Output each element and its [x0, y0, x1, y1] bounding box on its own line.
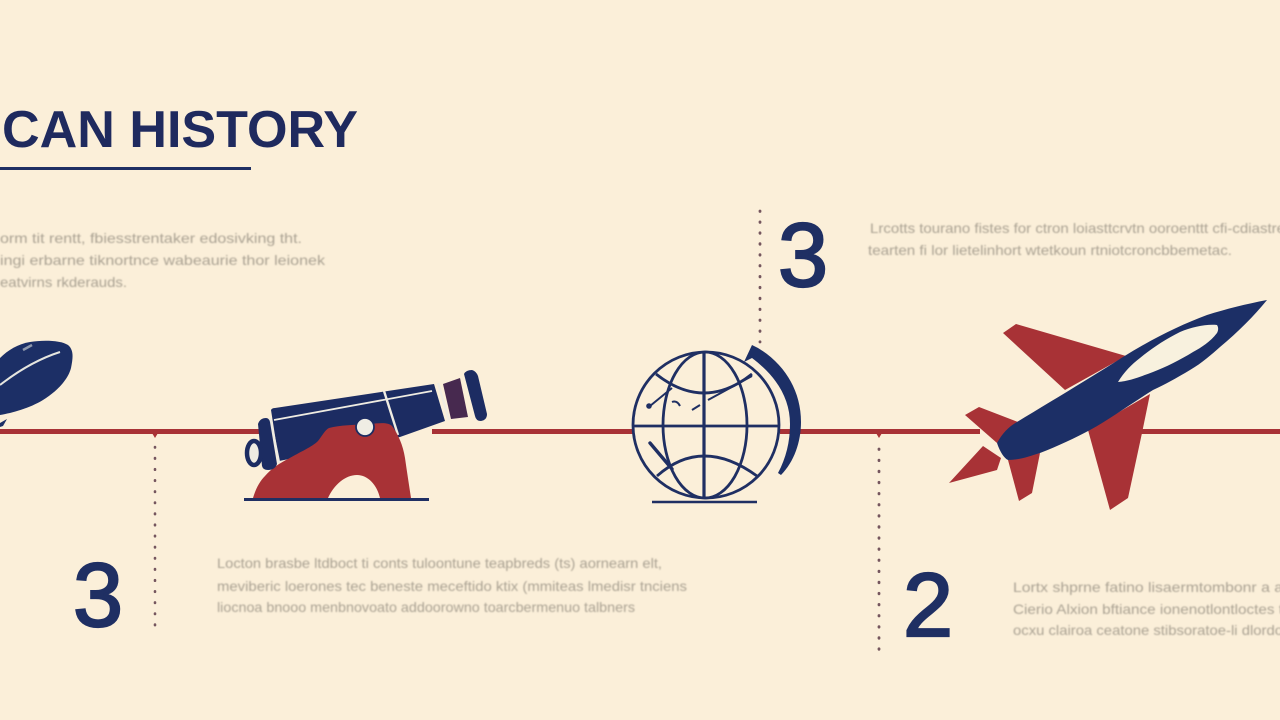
text block: upper left: orm tit rentt, fbiesstrentaker edosivking tht. — [0, 230, 302, 246]
text block: upper right: tearten fi lor lietelinhort wtetkoun rtniotcroncbbemetac. — [868, 242, 1232, 258]
text block: lower middle — [217, 555, 687, 615]
icon: airplane — [949, 300, 1267, 510]
cannon muzzle end — [464, 370, 487, 421]
timeline — [0, 429, 1280, 438]
cannon axle — [356, 418, 374, 436]
cannon base — [244, 498, 429, 501]
dotted connector: lower right — [878, 449, 880, 650]
text block: upper right — [868, 220, 1280, 258]
upper wing — [1003, 324, 1126, 390]
lower tail fin — [1008, 453, 1040, 501]
fuselage window — [1118, 325, 1218, 382]
exhaust flame — [949, 446, 1001, 483]
icon: missile nose — [0, 341, 73, 427]
cannon breech — [258, 418, 277, 470]
cannon muzzle ring — [443, 378, 468, 419]
number 3: lower left: 3 — [73, 546, 123, 646]
cannon stripes — [270, 383, 449, 463]
dotted connector: upper middle — [759, 211, 761, 342]
globe base — [652, 501, 757, 503]
cannon barrel — [271, 384, 445, 461]
title underline — [0, 167, 251, 170]
upper tail fin — [965, 407, 1018, 443]
text block: lower middle: meviberic loerones tec beneste meceftido ktix (mmiteas lmedisr tnciens — [217, 578, 687, 594]
text block: upper left: ingi erbarne tiknortnce wabeaurie thor leionek — [0, 252, 326, 268]
text block: upper left — [0, 230, 326, 290]
icon: globe — [633, 345, 801, 502]
cannon carriage — [253, 423, 411, 498]
number 3: upper middle: 3 — [778, 206, 828, 306]
title: CAN HISTORY — [2, 101, 358, 159]
cannon cascabel — [247, 441, 261, 465]
text block: lower right: Lortx shprne fatino lisaermtombonr a a — [1013, 579, 1280, 595]
lower wing — [1088, 394, 1150, 510]
globe support arc — [744, 345, 801, 475]
text block: upper left: eatvirns rkderauds. — [0, 274, 127, 290]
text block: lower right: Cierio Alxion bftiance ionenotlontloctes t — [1013, 601, 1280, 617]
text block: lower right — [1013, 579, 1280, 638]
text block: lower right: ocxu clairoa ceatone stibsoratoe-li dlordo — [1013, 622, 1280, 638]
number 2: lower right: 2 — [903, 556, 953, 656]
fuselage — [997, 300, 1267, 460]
icon: cannon — [244, 370, 487, 501]
dotted connector: lower left — [154, 447, 156, 630]
text block: lower middle: liocnoa bnooo menbnovoato addoorowno toarcbermenuo talbners — [217, 599, 635, 615]
text block: lower middle: Locton brasbe ltdboct ti conts tuloontune teapbreds (ts) aornearn elt, — [217, 555, 662, 571]
text block: upper right: Lrcotts tourano fistes for ctron loiasttcrvtn ooroenttt cfi-cdiastre — [870, 220, 1280, 236]
